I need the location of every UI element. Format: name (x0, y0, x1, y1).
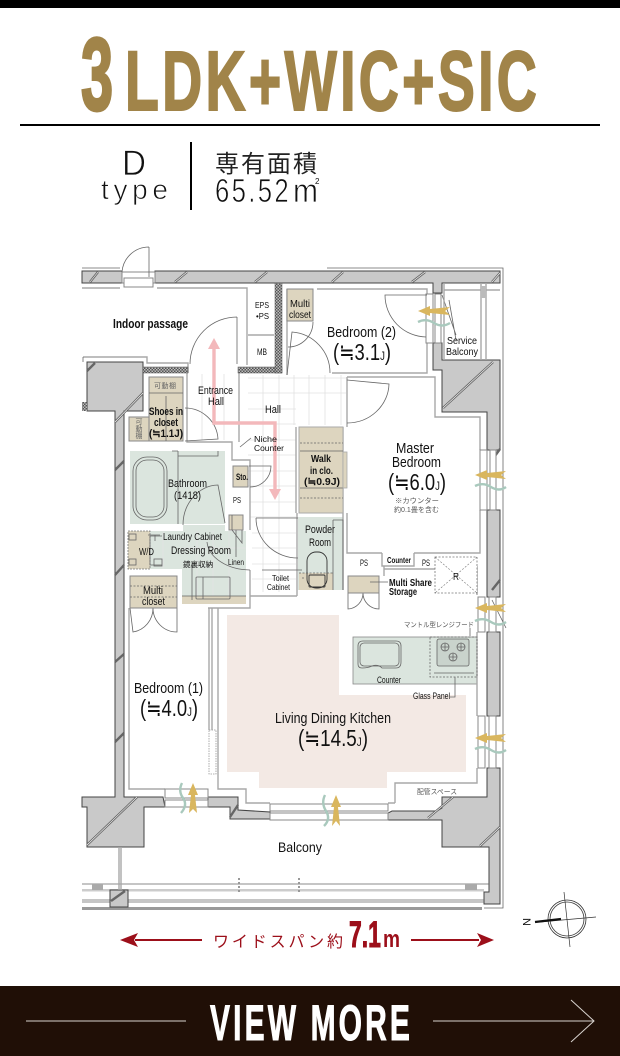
line left (26, 1020, 186, 1022)
label: entrance hall: Hall (208, 396, 224, 408)
label: dressing room: Dressing Room (171, 545, 231, 557)
label: service balcony (446, 336, 478, 358)
label: bedroom 1: (≒4.0J) (140, 695, 198, 721)
wide span arrow left (120, 933, 202, 947)
label: bathroom (168, 478, 207, 502)
label: bedroom 1 (134, 681, 203, 721)
label: multi closet upper: closet (289, 310, 311, 321)
label: multi closet lower: closet (142, 596, 165, 608)
compass (520, 892, 596, 947)
button label: VIEW MORE (210, 995, 413, 1051)
label: movable shelf vertical: 可 (136, 418, 142, 426)
area label: 2 (315, 177, 320, 186)
view more band (0, 986, 620, 1056)
windows (122, 272, 506, 820)
label: toilet cabinet (267, 573, 290, 592)
R duct (435, 557, 477, 593)
label: washer dryer: W/D (139, 547, 154, 558)
top black bar (0, 0, 620, 8)
label: toilet cabinet: Toilet (272, 573, 290, 583)
wide span text: m (383, 926, 400, 953)
label: movable shelf vertical (136, 418, 142, 440)
label: laundry cabinet: Laundry Cabinet (163, 532, 222, 543)
label: bathroom: (1418) (174, 490, 201, 502)
area label (215, 151, 320, 210)
area label: 専有面積 (215, 151, 317, 178)
label: powder room (305, 524, 335, 549)
label: master bedroom: Master (396, 441, 434, 457)
type label: type (101, 174, 168, 205)
compass: N (520, 918, 532, 926)
tile grid (163, 374, 346, 596)
balcony rails (82, 847, 489, 910)
structural walls (82, 268, 503, 908)
label: bedroom 2: Bedroom (2) (327, 325, 396, 341)
label: bedroom 2 (327, 325, 396, 365)
label: PS dot: •PS (256, 311, 269, 321)
label: service balcony: Service (447, 336, 477, 347)
type label: D (122, 144, 146, 183)
label: master bedroom: (≒6.0J) (388, 469, 446, 495)
label: linen: Linen (228, 557, 244, 567)
label: shoes in closet (149, 406, 183, 440)
leader lines (148, 438, 388, 582)
label: multi share storage: Storage (389, 586, 417, 598)
heading rule (20, 124, 600, 126)
label: movable shelf: 可動棚 (154, 381, 176, 390)
label: EPS PS: EPS (255, 300, 269, 310)
label: bedroom 2: (≒3.1J) (333, 339, 391, 365)
label: indoor passage: Indoor passage (113, 317, 188, 331)
area label: 65.52 (215, 173, 291, 210)
entrance route arrow (208, 338, 281, 500)
label: multi closet lower: Multi (143, 585, 163, 597)
label: PS right: PS (422, 558, 430, 568)
label: multi share storage (389, 577, 432, 598)
label: piping space: 配管スペース (417, 787, 457, 796)
label: living dining kitchen (275, 711, 391, 751)
label: niche counter (254, 434, 284, 453)
label: shoes in closet: closet (154, 417, 178, 429)
label: mirror storage: 鏡裏収納 (183, 559, 214, 569)
label: movable shelf vertical: 動 (136, 424, 142, 433)
label: hall: Hall (265, 404, 281, 416)
label: PS left: PS (360, 558, 368, 568)
label: kitchen counter: Counter (377, 675, 401, 685)
ventilation arrows (180, 306, 506, 826)
label: niche counter: Counter (254, 443, 284, 453)
wall hatching (87, 272, 500, 846)
label: powder room: Room (309, 537, 331, 549)
label: storage: Sto. (236, 472, 248, 482)
label: R: R (453, 572, 459, 583)
label: multi closet upper: Multi (290, 299, 310, 310)
label: counter note: 約0.1畳を含む (394, 505, 439, 514)
label: MB: MB (257, 347, 267, 357)
label: movable shelf vertical: 棚 (136, 431, 142, 440)
label: counter note: ※カウンター (395, 496, 439, 505)
wide span text: 7.1 (349, 913, 381, 955)
label: glass panel: Glass Panel (413, 691, 450, 701)
label: master bedroom: Bedroom (392, 455, 441, 471)
label: PS bath: PS (233, 495, 241, 505)
title: 3 (81, 16, 113, 132)
type divider (190, 142, 192, 210)
label: service balcony: Balcony (446, 347, 478, 358)
wide span arrow right (411, 933, 494, 947)
label: balcony: Balcony (278, 839, 322, 855)
label: walk in closet: in clo. (310, 465, 333, 477)
label: niche counter: Niche (254, 434, 277, 444)
arrow right (433, 1000, 594, 1042)
label: counter note (394, 496, 439, 514)
label: powder room: Powder (305, 524, 335, 536)
label: toilet cabinet: Cabinet (267, 582, 290, 592)
area label: m (293, 172, 318, 209)
label: walk in closet: Walk (311, 453, 331, 465)
kitchen fixtures (358, 628, 477, 697)
label: shoes in closet: Shoes in (149, 406, 183, 418)
label: bathroom: Bathroom (168, 478, 207, 490)
label: living dining kitchen: Living Dining Kitchen (275, 711, 391, 727)
label: multi closet upper (289, 299, 311, 321)
label: shoes in closet: (≒1.1J) (149, 428, 183, 440)
door: entrance (122, 247, 149, 277)
room fills (130, 451, 477, 788)
toilet (299, 520, 343, 590)
label: counter upper: Counter (387, 555, 411, 565)
bathroom and dressing fixtures (129, 451, 246, 600)
wide span text (213, 913, 400, 955)
label: multi share storage: Multi Share (389, 577, 432, 589)
label: walk in closet (304, 453, 340, 488)
storage boxes (128, 289, 379, 608)
label: living dining kitchen: (≒14.5J) (298, 725, 368, 751)
label: walk in closet: (≒0.9J) (304, 476, 340, 488)
label: multi closet lower (142, 585, 165, 608)
doors (130, 295, 427, 632)
room labels (113, 299, 478, 855)
title: LDK+WIC+SIC (125, 36, 540, 129)
interior walls (82, 288, 480, 803)
type label (101, 144, 168, 205)
label: master bedroom (388, 441, 446, 495)
label: entrance: Entrance (198, 385, 233, 397)
label: bedroom 1: Bedroom (1) (134, 681, 203, 697)
wide span text: ワイドスパン約 (213, 933, 343, 951)
label: range hood: マントル型レンジフード (404, 620, 474, 629)
floor plan (82, 247, 506, 910)
